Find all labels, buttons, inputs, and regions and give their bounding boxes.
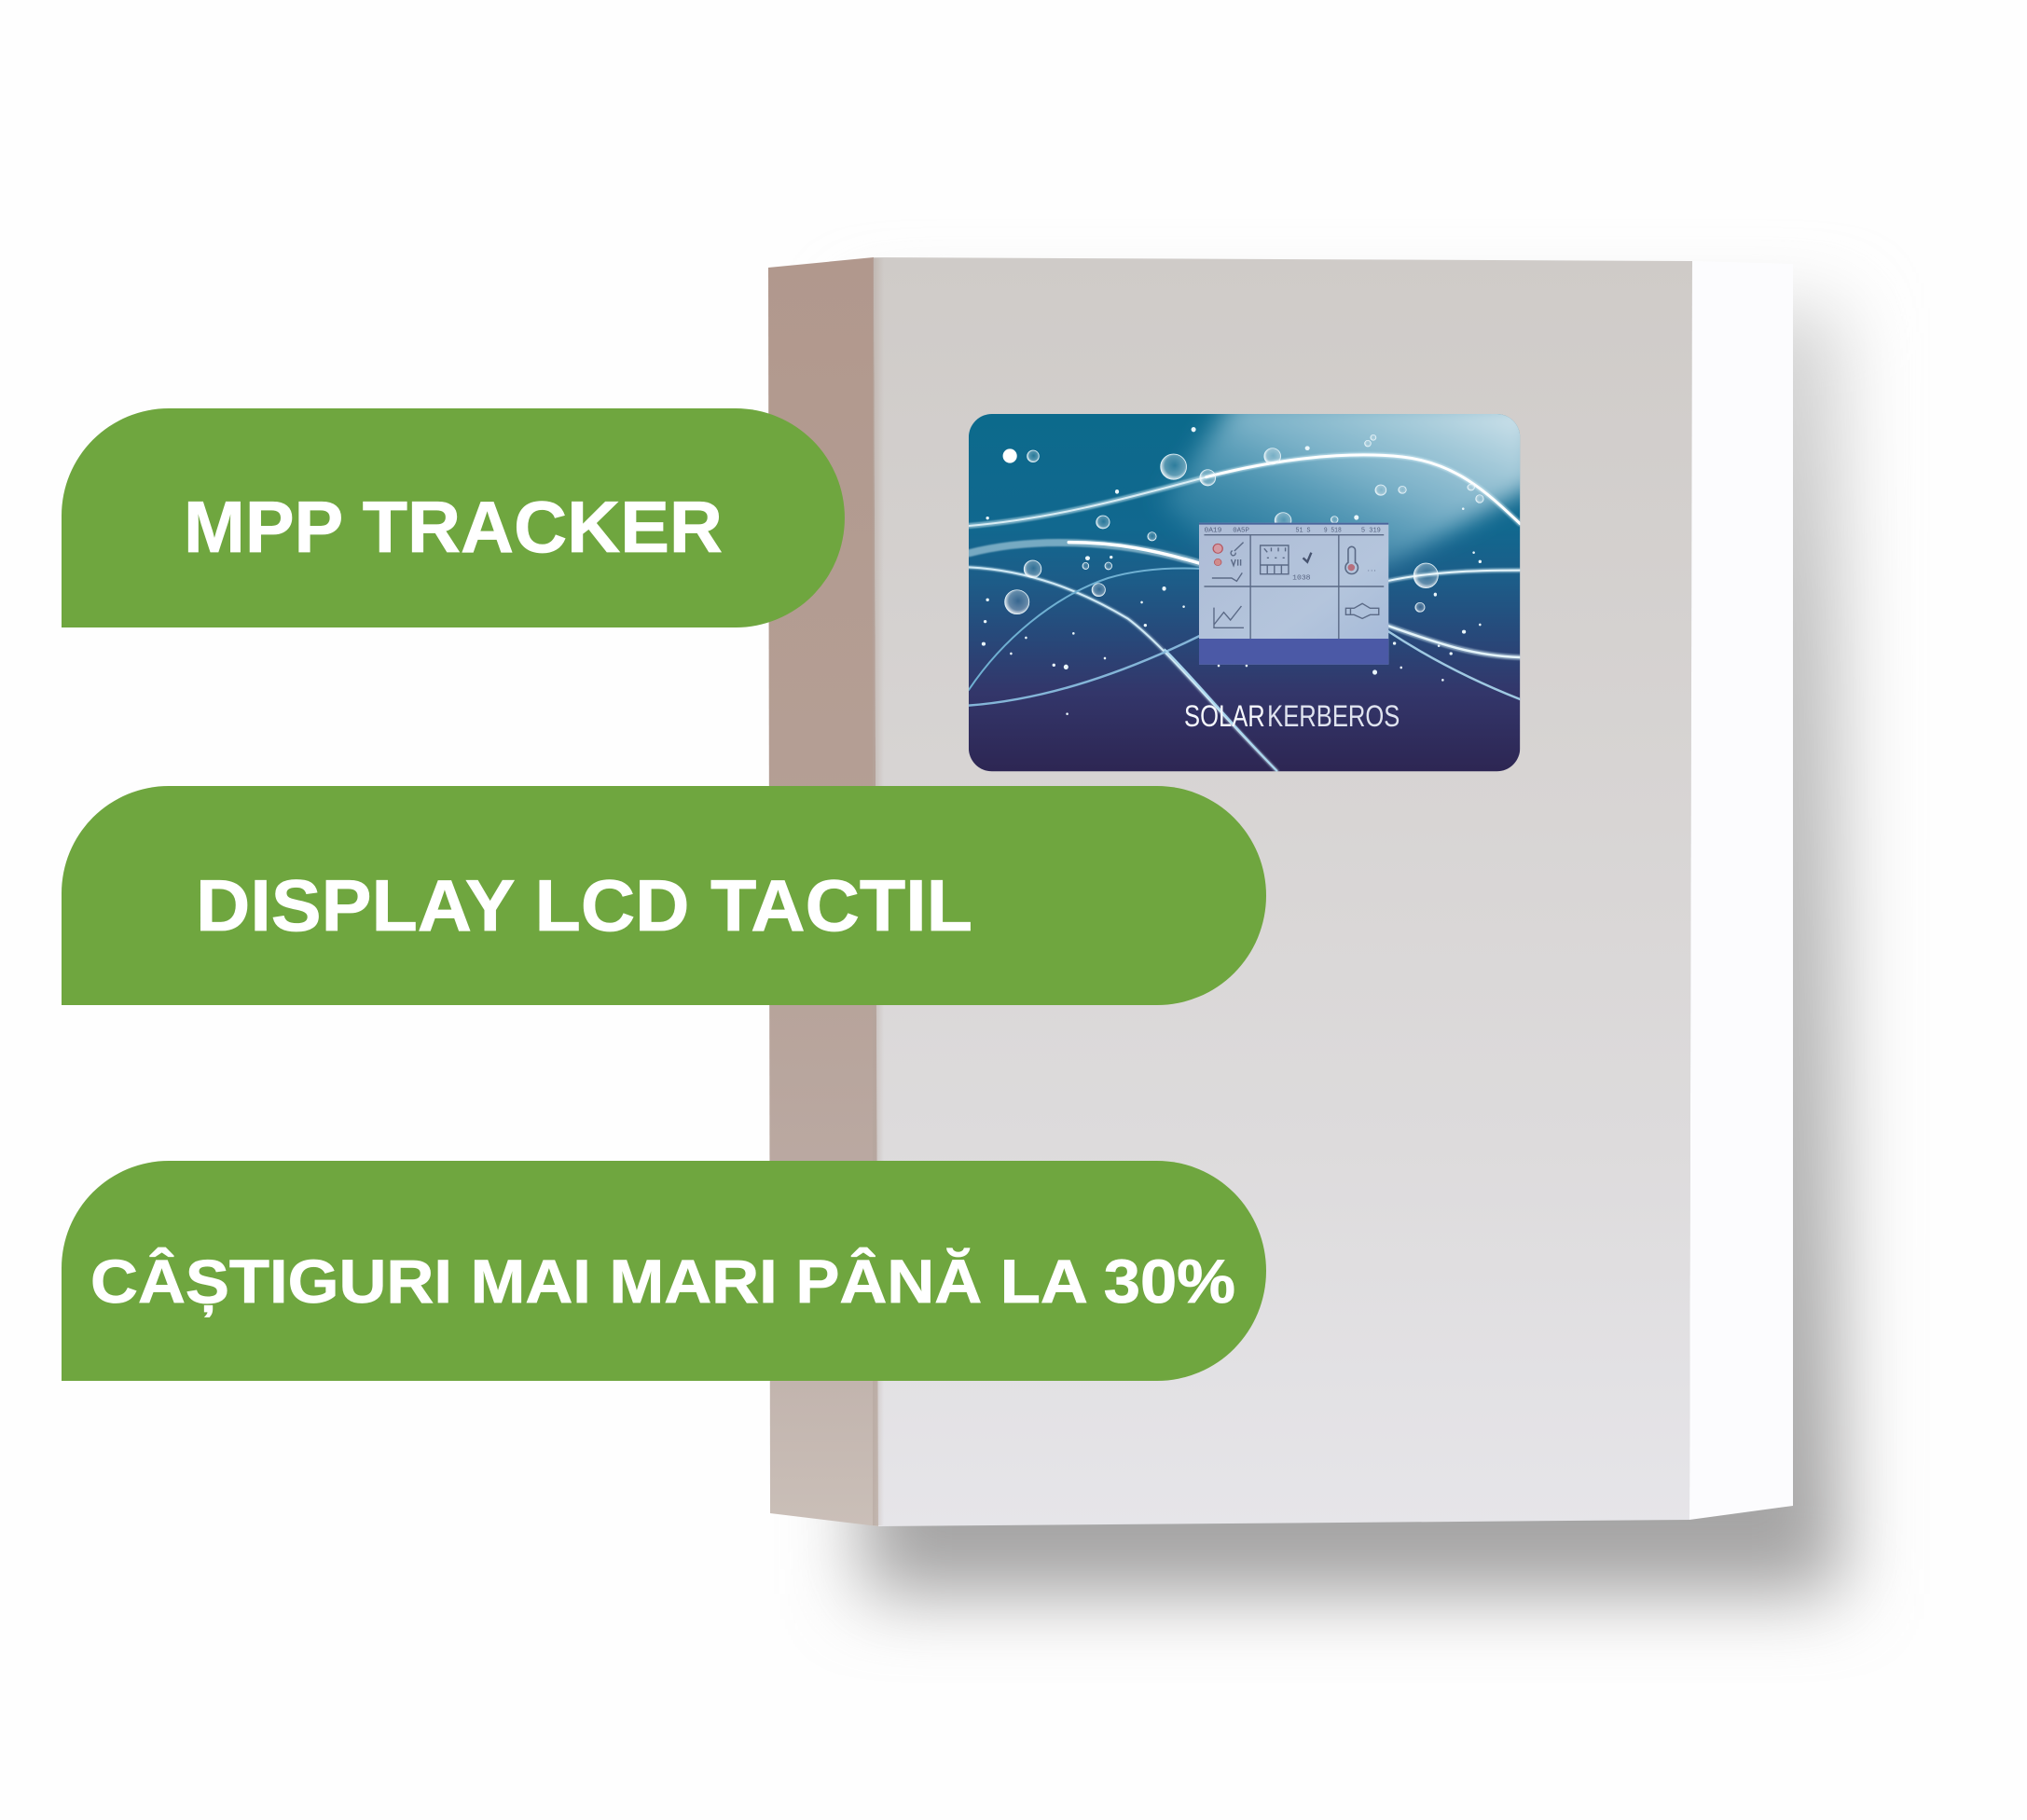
LCD status readouts: 0A5P [1233,526,1249,534]
panel: DISPLAY LCD TACTIL [62,786,1266,1005]
LCD status readouts: 9 518 [1324,526,1342,534]
label: CÂȘTIGURI MAI MARI PÂNĂ LA 30% [90,1247,1235,1317]
LCD status readouts [1204,526,1381,582]
device: white enclosure [768,257,1793,1526]
panel background [969,414,1520,771]
display panel: Solar Kerberos control label [969,401,1539,771]
LCD icon: collector panel [1261,545,1289,574]
green tab [62,408,845,627]
LCD icon: alarm indicators [1213,544,1222,566]
drop shadow of device [862,308,1841,1594]
LCD status readouts: 0A19 [1204,526,1221,534]
panel: CÂȘTIGURI MAI MARI PÂNĂ LA 30% [62,1161,1266,1381]
green tab [62,1161,1266,1381]
LCD screen surface [1199,523,1388,665]
LCD status readouts: 51 S [1296,526,1311,534]
LCD touch screen [1199,523,1388,665]
flowing light curves [969,455,1520,771]
device front face [874,257,1692,1526]
LCD icon: check mark [1303,553,1311,562]
LCD icon: thermometer [1345,546,1358,574]
small sparkle dots [982,427,1482,715]
LCD status readouts: 5 319 [1361,526,1381,534]
brand name: SOLARKERBEROS: SOLARKERBEROS [1184,700,1400,734]
green tab [62,786,1266,1005]
panel: MPP TRACKER [62,408,845,627]
LCD status readouts: 1038 [1292,573,1311,582]
LCD icon: line chart [1214,606,1244,627]
bubbles [1005,434,1483,614]
LCD status readouts: ... [1367,566,1376,573]
LCD grid lines [1204,535,1384,639]
label: MPP TRACKER [184,486,723,568]
label: DISPLAY LCD TACTIL [196,864,972,946]
device right side face [1689,261,1793,1520]
LCD icon: key and valve symbols [1212,543,1244,581]
LCD lower strip [1199,639,1388,665]
device left side face [768,257,878,1526]
LCD icon: pump [1345,603,1379,618]
infographic canvas [62,257,1890,1643]
status indicator dot [1003,448,1017,463]
brand line continuing over footer [1165,650,1276,771]
